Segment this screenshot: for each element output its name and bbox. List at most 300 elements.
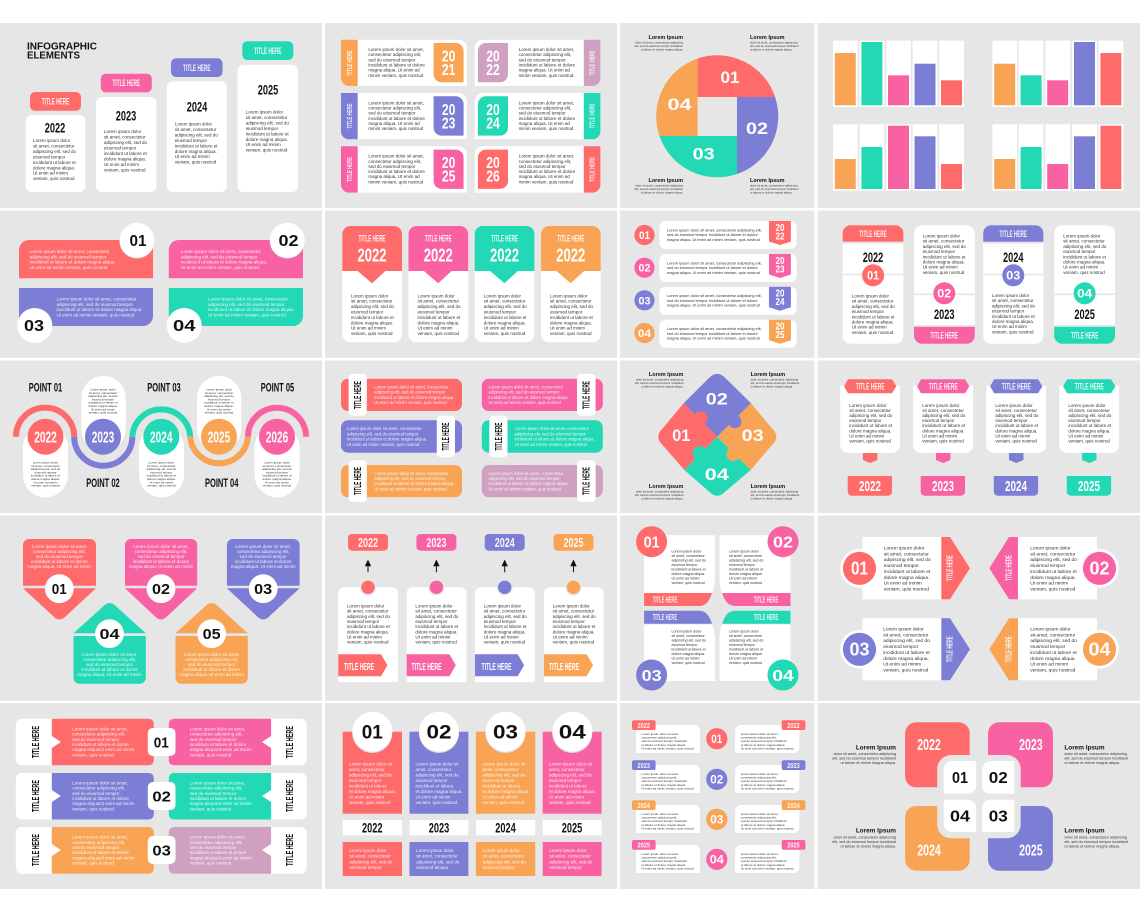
banner 02: 02 <box>278 233 299 250</box>
block 01: consectetur adipiscing elit, <box>33 549 86 554</box>
banner 02: Ut enim ad minim veniam, quis nostrud <box>181 265 259 270</box>
note top right: ut labore et dolore magna aliqua. <box>750 48 792 52</box>
tag card 01: incididunt ut labore et <box>884 569 931 575</box>
tag card 04 <box>989 618 1119 680</box>
column 03: adipiscing elit, sed do <box>482 772 526 777</box>
card pink: adipiscing elit, sed do <box>418 304 461 309</box>
tab 2026: TITLE HERE <box>590 157 597 182</box>
card pink: eiusmod tempor <box>418 310 450 314</box>
note bottom left: dolor sit amet, consectetur adipiscing <box>635 184 683 188</box>
note bottom left: dolor sit amet, consectetur adipiscing <box>636 489 684 493</box>
hex card 2025 <box>1059 379 1119 496</box>
hex card 2025: Lorem ipsum dolor <box>1068 403 1106 408</box>
tag card 04: adipiscing elit, sed do <box>1030 638 1077 644</box>
list row 03: 24 <box>776 297 785 308</box>
hex card 2024 <box>986 379 1046 496</box>
column 2023 <box>407 534 466 682</box>
card orange: veniam, quis nostrud <box>550 331 592 336</box>
note bottom right <box>751 484 799 501</box>
ticket row 02: consectetur adipiscing elit, <box>190 786 242 791</box>
column 04: Lorem ipsum dolor <box>549 848 587 853</box>
hex card 2025: dolore magna aliqua. <box>1068 428 1110 433</box>
card 2022: Lorem ipsum dolor <box>33 138 71 143</box>
tag card 01: veniam, quis nostrud <box>884 586 929 592</box>
year circles: 2023 <box>92 430 114 446</box>
node card 04: sit amet, consectetur <box>1063 239 1105 244</box>
list row 02: Lorem ipsum dolor sit amet, consectetur adipiscing elit, <box>667 260 762 265</box>
note bottom left: Lorem Ipsum <box>649 484 683 490</box>
petal 2022: 2022 <box>917 737 941 754</box>
column 2022: TITLE HERE <box>344 662 374 673</box>
block 02 <box>125 539 197 620</box>
note bottom right: elit, sed do eiusmod tempor incididunt <box>1064 840 1129 844</box>
tab 2024: TITLE HERE <box>590 103 597 128</box>
column 04: eiusmod tempor <box>549 778 582 783</box>
quadrant 04: Ut enim ad minim <box>729 656 757 660</box>
node card 04: dolore magna aliqua. <box>1063 260 1105 264</box>
column 2025: sit amet, consectetur <box>553 609 595 614</box>
capsule 2024 text: Lorem ipsum dolor <box>148 460 174 464</box>
note top left <box>832 744 897 765</box>
tab 2021: Lorem ipsum dolor sit amet, <box>368 47 424 52</box>
hex card 2023: Lorem ipsum dolor <box>922 403 960 408</box>
card pink: veniam, quis nostrud <box>418 331 460 336</box>
point labels: POINT 03 <box>147 381 181 395</box>
node card 01: veniam, quis nostrud <box>852 330 894 335</box>
tab 2023: consectetur adipiscing elit, <box>368 105 421 110</box>
ticket row 03: TITLE HERE <box>285 834 296 866</box>
card 2025: eiusmod tempor <box>246 126 279 131</box>
column 2023: Ut enim ad minim <box>415 634 451 639</box>
node card 02: 2023 <box>934 306 955 322</box>
title: INFOGRAPHIC <box>27 42 97 52</box>
mirrored row 02: consectetur adipiscing elit, <box>741 775 777 779</box>
ticket row 03: incididunt ut labore et dolore <box>190 850 247 855</box>
capsule 2023 text: Lorem ipsum dolor <box>90 388 116 392</box>
petal 2024: 2024 <box>917 843 941 860</box>
tab 2022: sed do eiusmod tempor <box>519 57 566 62</box>
banner 04: incididunt ut labore et dolore magna aliqua. <box>208 307 294 312</box>
panel: year tabs <box>325 23 617 208</box>
column 2024: veniam, quis nostrud <box>484 640 526 645</box>
bar orange <box>341 460 462 502</box>
column 02: veniam, quis nostrud <box>416 800 458 805</box>
tag card 03: sit amet, consectetur <box>883 632 929 638</box>
note bottom left: ut labore et dolore magna aliqua. <box>840 844 896 848</box>
hex card 2022: Ut enim ad minim <box>849 433 885 438</box>
column 2024: incididunt ut labore et <box>484 624 527 629</box>
mirrored row 04: ut labore et dolore magna aliqua. <box>741 863 786 867</box>
mirrored row 01: Lorem ipsum dolor sit amet, <box>641 732 679 736</box>
card coral: Ut enim ad minim <box>351 326 386 331</box>
ticket row 03: consectetur adipiscing elit, <box>72 840 125 845</box>
quadrant 04: veniam, quis nostrud <box>729 661 762 665</box>
bar orange: Ut enim ad minim veniam, quis nostrud <box>374 486 447 491</box>
quadrant 02: sit amet, consectetur <box>729 554 763 558</box>
ticket row 02: magna aliquaUt enim ad minim <box>190 801 252 806</box>
node card 04: adipiscing elit, sed do <box>1063 244 1107 249</box>
node card 04: TITLE HERE <box>1071 330 1098 340</box>
column 2025: Ut enim ad minim <box>553 634 588 639</box>
column 03: Lorem ipsum dolor <box>483 848 520 853</box>
node card 04: Ut enim ad minim <box>1063 265 1098 270</box>
mirrored row 04: Lorem ipsum dolor sit amet, <box>641 852 679 856</box>
tag card 03: eiusmod tempor <box>883 644 919 650</box>
capsule 2023 text: veniam, quis nostrud <box>89 411 118 415</box>
hex card 2022 <box>840 379 900 496</box>
capsule 2026 text: sit amet, consectetur <box>263 464 291 468</box>
tab 2025: 20 <box>442 155 455 172</box>
mirrored row 03: 03 <box>710 813 724 827</box>
tab 2026: Lorem ipsum dolor sit amet, <box>519 154 574 159</box>
ticket row 02: TITLE HERE <box>31 780 42 812</box>
tab 2025: incididunt ut labore et dolore <box>368 169 425 174</box>
block 03: consectetur adipiscing elit, <box>237 549 290 554</box>
tag card 04: Ut enim ad minim <box>1030 662 1068 668</box>
column 2025: eiusmod tempor <box>553 619 585 624</box>
column 04: amet, consectetur <box>549 767 585 772</box>
node card 01: TITLE HERE <box>859 229 887 239</box>
hex card 2025: adipiscing elit, sed do <box>1068 413 1112 418</box>
tab 2023: incididunt ut labore et dolore <box>368 116 425 121</box>
capsule 2025 text: veniam, quis nostrud <box>205 411 234 415</box>
panel: alternating node cards <box>818 210 1140 358</box>
card 2022: TITLE HERE <box>42 96 69 106</box>
bar pink: TITLE HERE <box>582 381 593 409</box>
card 2024: TITLE HERE <box>183 63 211 73</box>
mirrored row 03: Ut enim ad minim veniam, quis nostrud <box>641 826 694 830</box>
card 2023: Ut enim ad minim <box>104 162 139 167</box>
card 2023: Lorem ipsum dolor <box>104 129 142 134</box>
capsule 2026 text: eiusmod tempor <box>266 470 288 474</box>
ticket row 03: TITLE HERE <box>31 834 42 866</box>
tag card 02: sit amet, consectetur <box>1030 551 1076 557</box>
note bottom right <box>1064 828 1129 848</box>
note top right: Lorem Ipsum <box>751 372 785 378</box>
tag card 04: incididunt ut labore et <box>1030 650 1077 656</box>
note top left: elit, sed do eiusmod tempor incididunt <box>635 381 684 385</box>
panel: four petal diagram <box>818 703 1140 889</box>
banner 01: adipiscing elit, sed do eiusmod tempor <box>30 254 107 259</box>
petal 2023: 2023 <box>1019 737 1043 754</box>
hex card 2023 <box>913 379 973 496</box>
capsule 2023 text: dolore magna aliqua. <box>89 404 118 408</box>
mirrored row 01: 2022 <box>638 721 650 730</box>
centre box 01: 01 <box>952 770 968 787</box>
card pink: sit amet, consectetur <box>418 299 460 304</box>
ticket row 01: consectetur adipiscing elit, <box>72 732 125 737</box>
note bottom right <box>750 178 799 195</box>
card 2022: sit amet, consectetur <box>33 143 75 148</box>
capsule 2025 text: eiusmod tempor <box>208 397 230 401</box>
node card 02: adipiscing elit, sed do <box>923 244 966 249</box>
note bottom right: dolor sit amet, consectetur adipiscing <box>751 489 799 493</box>
ticket row 02: veniam, quis nostrud <box>72 806 114 811</box>
column 01: amet, consectetur <box>349 767 385 772</box>
point labels <box>29 381 294 490</box>
block 05: 05 <box>203 626 221 643</box>
tag card 01: dolore magna aliqua. <box>884 575 929 581</box>
puzzle diagram: 02 <box>706 390 728 409</box>
mirrored row 03: sed do eiusmod tempor incididunt <box>641 819 687 823</box>
column 2025: dolore magna aliqua. <box>553 629 595 634</box>
bar coral: TITLE HERE <box>353 381 364 409</box>
tab 2021 <box>341 40 467 86</box>
note top right: dolor sit amet, consectetur adipiscing <box>750 41 798 45</box>
node card 03: eiusmod tempor <box>992 309 1025 314</box>
tab 2025: TITLE HERE <box>347 157 354 182</box>
bar teal: Lorem ipsum dolor sit amet, consectetur <box>515 426 590 431</box>
card pink: dolore magna aliqua. <box>418 320 460 325</box>
card orange: dolore magna aliqua. <box>550 320 592 325</box>
column 2024: eiusmod tempor <box>484 619 516 624</box>
list row 01: magna aliqua. Ut enim ad minim veniam, quis nostrud <box>667 237 760 242</box>
quadrant 01: Lorem ipsum dolor <box>672 550 702 554</box>
card pink: Lorem ipsum dolor <box>418 293 455 298</box>
node card 01: incididunt ut labore et <box>852 314 895 319</box>
ticket row 01: magna aliquaUt enim ad minim <box>190 747 252 752</box>
mirrored row 02: Ut enim ad minim veniam, quis nostrud <box>641 786 694 790</box>
card 2025: dolore magna aliqua. <box>246 137 288 142</box>
panel: mirrored list <box>620 703 814 889</box>
node card 01: Lorem ipsum dolor <box>852 294 889 298</box>
node card 03: adipiscing elit, sed do <box>992 303 1036 308</box>
mirrored row 02: 02 <box>710 773 724 787</box>
hex card 2024: dolore magna aliqua. <box>995 428 1037 433</box>
capsule 2026 text: incididunt ut labore et <box>262 474 292 478</box>
centre box 02: 02 <box>989 770 1008 787</box>
card pink: 2022 <box>424 246 453 266</box>
quadrant 04: Lorem ipsum dolor <box>729 630 760 634</box>
mirrored row 04: consectetur adipiscing elit, <box>741 855 777 859</box>
note top right: ut labore et dolore magna aliqua. <box>1064 761 1120 765</box>
note bottom right: ut labore et dolore magna aliqua. <box>751 497 793 501</box>
block 02: consectetur adipiscing elit, <box>135 549 187 554</box>
bar mauve: Ut enim ad minim veniam, quis nostrud <box>488 486 562 491</box>
note top right: Lorem Ipsum <box>750 35 785 41</box>
node card 01: dolore magna aliqua. <box>852 320 894 324</box>
panel: arrow up cards <box>325 516 617 701</box>
centre box 04: 04 <box>950 808 970 826</box>
hex card 2023: sit amet, consectetur <box>922 408 964 413</box>
ticket row 02 <box>16 773 307 820</box>
hex card 2022: veniam, quis nostrud <box>849 438 891 443</box>
quadrant 02: incididunt ut labore et <box>729 567 763 571</box>
note top right: elit, sed do eiusmod tempor incididunt <box>750 44 799 48</box>
petal 2023 <box>988 722 1053 787</box>
note bottom right: Lorem Ipsum <box>750 178 785 184</box>
tab 2026: 20 <box>486 155 500 172</box>
note bottom left: elit, sed do eiusmod tempor incididunt <box>832 840 897 844</box>
bar mauve: TITLE HERE <box>582 467 593 495</box>
banner 03 <box>17 288 153 343</box>
node card 02: TITLE HERE <box>931 330 958 340</box>
capsule 2023 text: adipiscing elit, sed do <box>88 394 118 398</box>
tab 2026: magna aliqua. Ut enim ad <box>519 174 570 179</box>
quadrant 03: 03 <box>642 668 662 685</box>
tab 2025: Lorem ipsum dolor sit amet, <box>368 154 424 159</box>
capsule 2024 text: Ut enim ad minim <box>149 480 174 484</box>
tab 2023: minim veniam, quis nostrud <box>368 126 424 131</box>
tab 2026: consectetur adipiscing elit, <box>519 159 571 164</box>
title <box>27 42 97 62</box>
block 05: Lorem ipsum dolor sit amet, <box>184 652 239 657</box>
tab 2022: magna aliqua. Ut enim ad <box>519 68 570 73</box>
list row 03: 03 <box>638 295 650 307</box>
block 01: sed do eiusmod tempor <box>36 554 84 559</box>
note bottom left <box>635 484 684 501</box>
ticket row 01: incididunt ut labore et dolore <box>190 742 247 747</box>
tab 2026 <box>475 146 600 193</box>
card 2023 <box>96 74 156 192</box>
mirrored row 02: Lorem ipsum dolor sit amet, <box>641 772 679 776</box>
card 2024 <box>167 58 227 192</box>
ticket row 03: veniam, quis nostrud <box>72 860 114 865</box>
mirrored row 04: 2025 <box>638 841 650 850</box>
note top left: elit, sed do eiusmod tempor incididunt <box>634 44 683 48</box>
mirrored row 01: Ut enim ad minim veniam, quis nostrud <box>741 746 794 750</box>
ticket row 01: incididunt ut labore et dolore <box>72 742 129 747</box>
block 02: sed do eiusmod tempor <box>137 554 185 559</box>
quadrant 01 <box>636 526 715 606</box>
column 04: incididunt ut labore <box>549 783 587 788</box>
capsule 2022 text: dolore magna aliqua. <box>31 477 60 481</box>
column 01: 01 <box>362 722 383 744</box>
note top left: dolor sit amet, consectetur adipiscing <box>635 41 683 45</box>
list row 04: magna aliqua. Ut enim ad minim veniam, quis nostrud <box>667 336 760 341</box>
node card 02 <box>914 225 975 344</box>
quadrant 02: dolore magna aliqua. <box>729 572 763 576</box>
quadrant 02: Ut enim ad minim <box>729 576 757 580</box>
hex card 2024: Ut enim ad minim <box>995 433 1031 438</box>
column 2023: eiusmod tempor <box>415 619 448 624</box>
bar purple: Ut enim ad minim veniam, quis nostrud <box>347 442 420 447</box>
quadrant 01: dolore magna aliqua. <box>672 572 705 576</box>
quadrant 03: dolore magna aliqua. <box>672 652 705 656</box>
quadrant 03: adipiscing elit, sed do <box>672 638 706 642</box>
tab 2024: 24 <box>486 115 500 132</box>
card teal: Ut enim ad minim <box>484 326 519 331</box>
column 2023: Lorem ipsum dolor <box>415 604 453 608</box>
ticket row 01: sed do eiusmod tempor <box>190 737 237 742</box>
column 2023: 2023 <box>426 535 446 550</box>
bar pink: adipiscing elit, sed do eiusmod tempor <box>488 390 560 395</box>
column 2024 <box>475 534 535 682</box>
column 2023: TITLE HERE <box>412 662 442 673</box>
hex card 2024: adipiscing elit, sed do <box>995 413 1039 418</box>
note top right: elit, sed do eiusmod tempor incididunt <box>751 381 799 385</box>
card 2024: dolore magna aliqua. <box>175 149 217 154</box>
quadrant 01: TITLE HERE <box>653 595 678 604</box>
centre box 04 <box>944 800 976 832</box>
block 03: Lorem ipsum dolor sit amet, <box>235 544 291 549</box>
bar mauve: incididunt ut labore et dolore magna aliqua. <box>488 481 569 486</box>
card 2022: Ut enim ad minim <box>33 171 68 176</box>
column 02: adipiscing elit, sed do <box>416 859 460 864</box>
capsule 2022 text: veniam, quis nostrud <box>31 484 60 488</box>
ticket row 02: Lorem ipsum dolor sit amet, <box>72 780 128 786</box>
column 01: adipiscing elit, sed do <box>349 772 393 777</box>
mirrored row 03: consectetur adipiscing elit, <box>641 815 677 819</box>
panel: quadrant cards <box>620 516 814 701</box>
card pink <box>408 226 468 342</box>
mirrored row 03: consectetur adipiscing elit, <box>741 815 777 819</box>
quadrant 04: adipiscing elit, sed do <box>729 638 763 642</box>
quadrant 01: incididunt ut labore et <box>672 567 706 571</box>
mirrored row 04 <box>632 840 805 873</box>
capsule 2022 text: Lorem ipsum dolor <box>33 460 58 464</box>
ticket row 01: TITLE HERE <box>285 726 296 758</box>
block 02: Lorem ipsum dolor sit amet, <box>133 544 189 549</box>
note top left: elit, sed do eiusmod tempor incididunt <box>832 757 897 761</box>
card 2024: veniam, quis nostrud <box>175 160 217 165</box>
card 2025: TITLE HERE <box>254 46 282 56</box>
tag card 04: 04 <box>1088 640 1110 660</box>
bar pink: Ut enim ad minim veniam, quis nostrud <box>488 400 562 405</box>
ticket row 02: sed do eiusmod tempor <box>72 791 120 796</box>
mirrored row 01: sed do eiusmod tempor incididunt <box>741 739 787 743</box>
mirrored row 04: Ut enim ad minim veniam, quis nostrud <box>741 866 794 870</box>
note top left: ut labore et dolore magna aliqua. <box>641 48 683 52</box>
node card 02: dolore magna aliqua. <box>923 260 965 264</box>
node card 04: 04 <box>1077 287 1092 301</box>
column 01: 2022 <box>362 820 383 836</box>
tab 2022: Lorem ipsum dolor sit amet, <box>519 47 574 52</box>
bar teal <box>482 416 603 457</box>
banner 02: incididunt ut labore et dolore magna aliqua. <box>181 260 267 265</box>
note bottom right: dolor sit amet, consectetur adipiscing <box>1064 835 1127 839</box>
node card 02: incididunt ut labore et <box>923 254 966 259</box>
card coral: 2022 <box>358 246 386 266</box>
bar pink: Lorem ipsum dolor sit amet, consectetur <box>488 384 564 390</box>
card pink: TITLE HERE <box>425 234 452 244</box>
mirrored row 03: ut labore et dolore magna aliqua. <box>741 823 786 827</box>
quadrant 04: 04 <box>772 668 794 685</box>
mirrored row 04: Lorem ipsum dolor sit amet, <box>741 852 779 856</box>
tab 2023: magna aliqua. Ut enim ad <box>368 121 420 126</box>
panel: stepped title cards <box>0 23 322 208</box>
hex card 2022: sit amet, consectetur <box>849 408 891 413</box>
card teal: dolore magna aliqua. <box>484 320 526 325</box>
note bottom left: elit, sed do eiusmod tempor incididunt <box>635 493 684 497</box>
column 2024: TITLE HERE <box>482 662 512 673</box>
bar orange: adipiscing elit, sed do eiusmod tempor <box>374 476 446 481</box>
card 2024: adipiscing elit, sed do <box>175 132 218 137</box>
column 02: incididunt ut labore <box>416 783 454 788</box>
column 02: Lorem ipsum dolor sit <box>416 761 459 766</box>
note top right: dolor sit amet, consectetur adipiscing <box>1064 752 1127 756</box>
puzzle diagram: 01 <box>672 426 690 445</box>
column 2025 <box>544 534 604 682</box>
bar chart top left <box>833 41 964 107</box>
card 2022: eiusmod tempor <box>33 154 66 159</box>
tag card 01: Lorem ipsum dolor <box>884 546 925 552</box>
list row 01: sed do eiusmod tempor incididunt ut labore et dolore <box>667 232 758 237</box>
column 04 <box>543 712 602 876</box>
hex card 2023: TITLE HERE <box>929 382 958 392</box>
node card 01: 01 <box>867 269 879 283</box>
ticket row 01: veniam, quis nostrud <box>72 752 114 757</box>
tab 2024: magna aliqua. Ut enim ad <box>519 121 570 126</box>
block 02: magna aliqua. Ut enim ad minim <box>129 564 194 569</box>
quadrant 04 <box>720 611 798 690</box>
card 2024: Lorem ipsum dolor <box>175 122 212 126</box>
node card 03: dolore magna aliqua. <box>992 319 1034 324</box>
hex card 2022: incididunt ut labore et <box>849 423 893 428</box>
ticket row 02: sed do eiusmod tempor <box>190 791 237 796</box>
tab 2025: sed do eiusmod tempor <box>368 164 416 169</box>
column 04: sit amet, consectetur <box>549 854 591 859</box>
